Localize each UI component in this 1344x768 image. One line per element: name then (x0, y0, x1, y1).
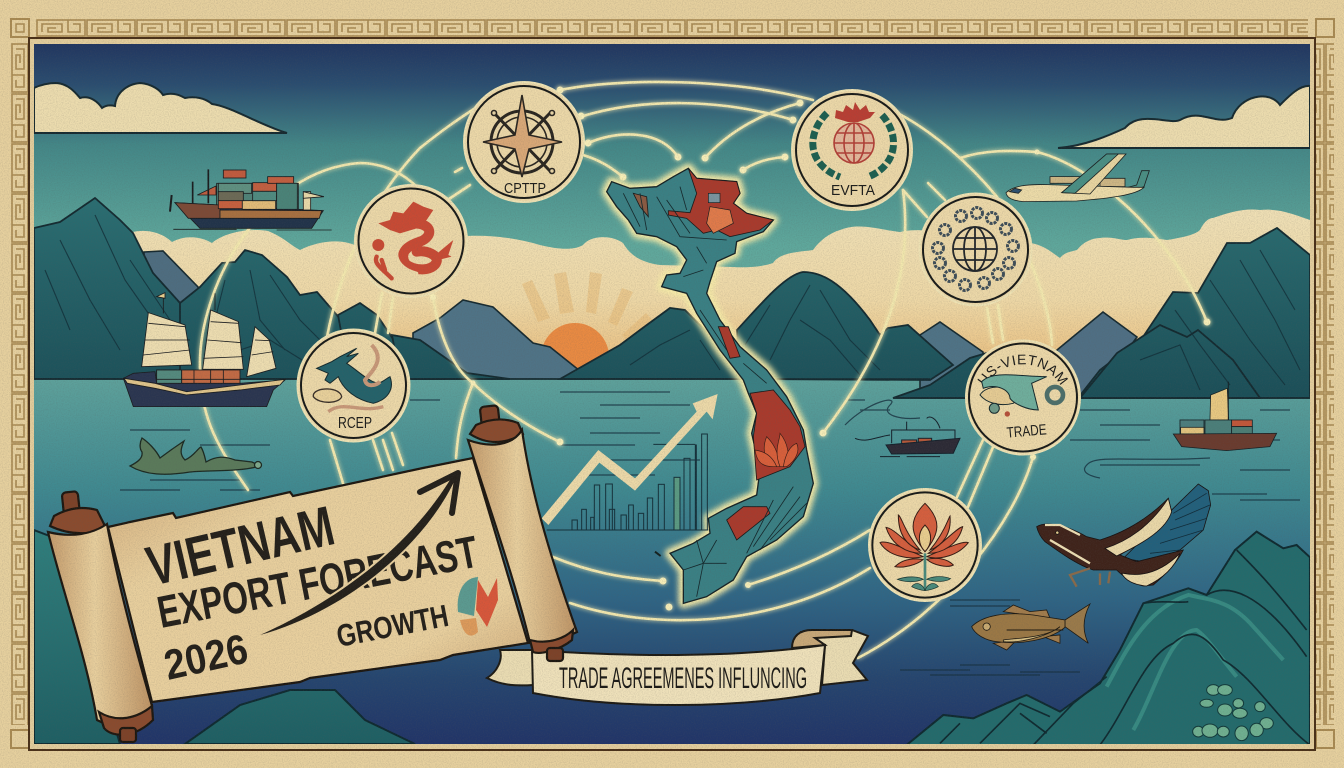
plane (1006, 154, 1149, 202)
badge: RCEP (298, 330, 410, 442)
Vietnam map (542, 168, 813, 603)
plant (1193, 685, 1273, 741)
map leaf veins (623, 187, 807, 597)
title: 2026: 2026 (160, 625, 252, 689)
small cargo boat (855, 417, 960, 457)
globe (953, 227, 997, 271)
eagle (1037, 484, 1211, 587)
sun (541, 323, 609, 391)
map lotus (755, 433, 798, 467)
title: Vietnam: VIETNAM (141, 494, 340, 598)
title scroll (48, 405, 577, 742)
right roller (468, 405, 577, 661)
sun rays (522, 272, 653, 343)
badge: lotus (869, 489, 981, 601)
route nodes (430, 86, 1210, 610)
left mountains (34, 198, 510, 379)
teal dragon (313, 345, 391, 412)
label: growth: GROWTH (334, 598, 451, 654)
cloud top right (1058, 86, 1310, 148)
badge: dragon (355, 185, 467, 297)
trade route rings (200, 82, 1207, 658)
left roller (48, 491, 153, 742)
cloud top left (34, 83, 287, 133)
scroll paper (108, 458, 528, 702)
sea creature (130, 438, 262, 474)
pie chart icon (458, 577, 498, 636)
map glow (607, 168, 813, 603)
badge: US-Vietnam trade (965, 340, 1081, 456)
CPTTP label: CPTTP (504, 180, 546, 197)
bottom left mountains (34, 530, 415, 744)
mountain ridge lines (45, 215, 1300, 390)
growth arrow (260, 473, 458, 635)
gear ring (932, 208, 1018, 290)
US-Vietnam label: US-VIETNAM (978, 354, 1068, 385)
centre and right mountains (560, 228, 1310, 398)
back mountains (144, 251, 1137, 398)
sea (34, 379, 1310, 744)
badge: EVFTA (792, 90, 912, 210)
cargo ship top left (170, 169, 332, 230)
map land (607, 168, 813, 603)
sky (34, 44, 1310, 384)
EVFTA label: EVFTA (831, 182, 875, 199)
TRADE label: TRADE (1006, 421, 1047, 442)
laurel (813, 113, 894, 177)
title: Export Forecast: EXPORT FORECAST (153, 526, 482, 638)
water ripple lines (120, 380, 1300, 675)
growth chart (542, 394, 718, 530)
badge: CPTTP (464, 82, 584, 202)
mid cloud band and glowing horizon (34, 209, 1310, 400)
RCEP label: RCEP (338, 415, 372, 432)
banner ribbon (487, 630, 868, 705)
chart arrow (542, 394, 718, 525)
junk ship (123, 293, 285, 407)
red dragon (372, 202, 453, 278)
red globe (834, 123, 874, 163)
fish (972, 604, 1090, 650)
chart bars (547, 434, 708, 530)
fish map emblem (980, 375, 1063, 417)
map red regions (633, 168, 805, 540)
right sailboat (1173, 382, 1277, 451)
lotus flower (880, 503, 968, 567)
badge: globe ring (920, 194, 1032, 306)
compass (483, 95, 562, 177)
lotus crown (835, 102, 875, 122)
bottom right mountains (907, 532, 1310, 745)
banner ribbon: TRADE AGREEMENES INFLUNCING (559, 662, 807, 695)
